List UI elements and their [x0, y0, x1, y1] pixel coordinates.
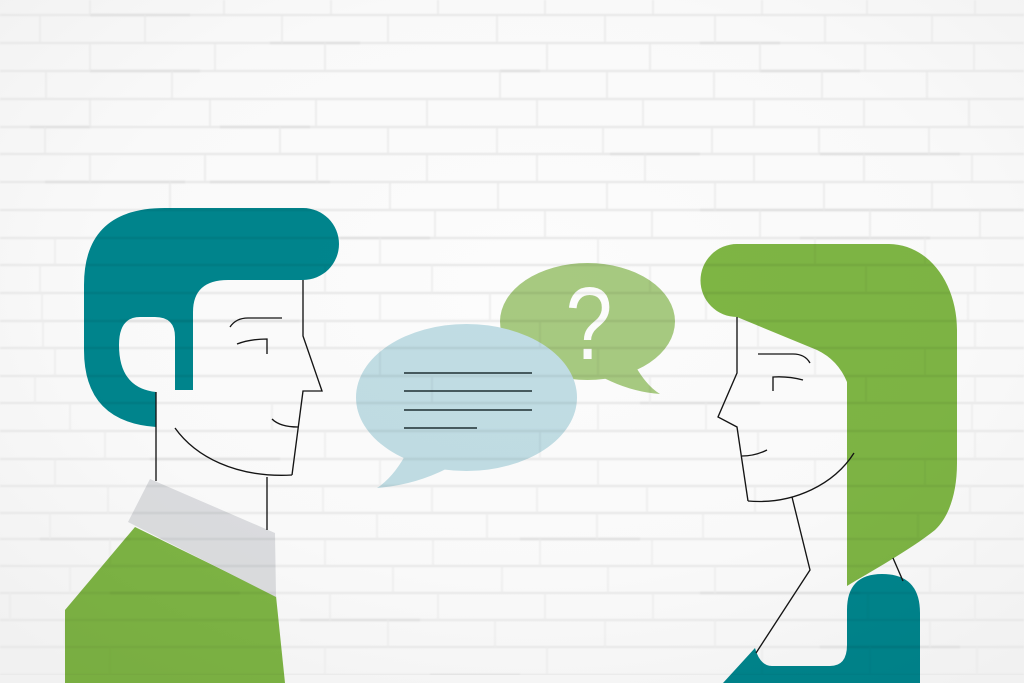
man hair: [84, 208, 339, 427]
woman face outline: [718, 317, 903, 653]
man face outline: [156, 280, 322, 530]
woman hair: [700, 244, 957, 586]
text speech bubble: [356, 324, 577, 488]
woman top: [723, 574, 920, 683]
speech bubbles: [356, 263, 675, 488]
question speech bubble: [500, 263, 675, 394]
question mark: ?: [566, 266, 612, 381]
woman figure: [700, 244, 957, 683]
man figure: [65, 208, 339, 683]
man collar: [128, 479, 276, 597]
man sweater and collar: [65, 479, 285, 683]
lines of text in bubble: [404, 373, 532, 428]
man sweater: [65, 527, 285, 683]
